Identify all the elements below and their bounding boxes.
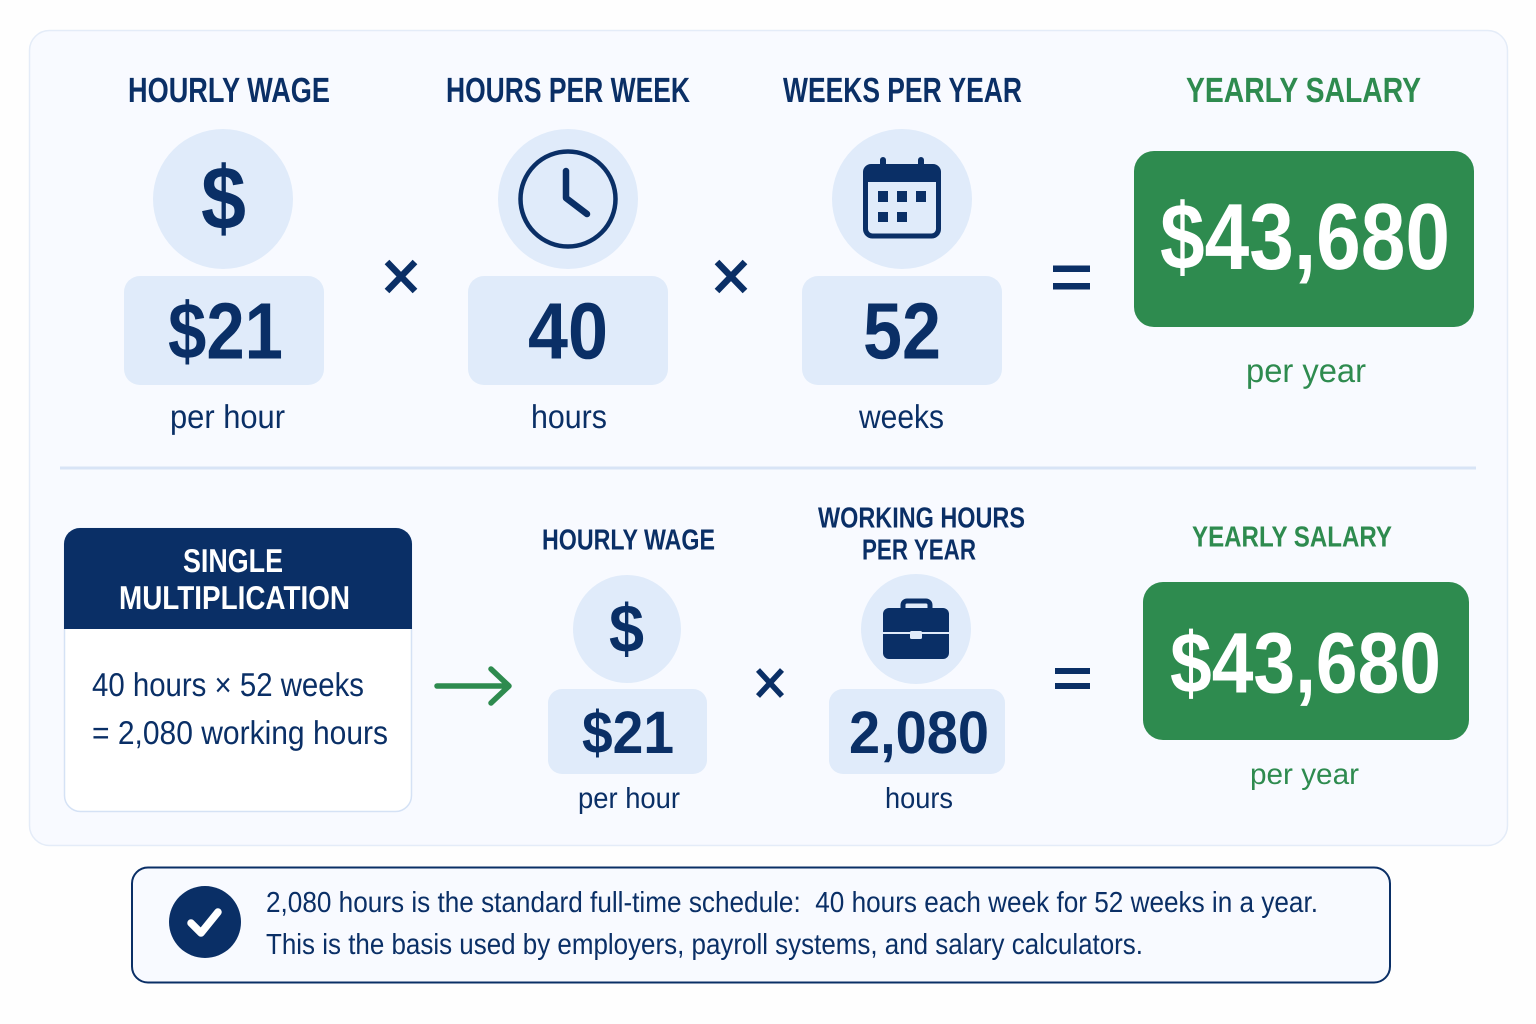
result box: $43,680 xyxy=(1134,151,1474,327)
column: yearly salary result (lower) xyxy=(1143,522,1469,791)
label: per hour: per hour xyxy=(170,398,285,435)
column: working hours per year xyxy=(818,502,1025,815)
icon: dollar sign: $ xyxy=(609,591,644,667)
note text: 2,080 hours is the standard full-time schedule: 40 hours each week for 52 weeks in a year. xyxy=(266,887,1318,919)
label: hours: hours xyxy=(531,398,607,435)
heading: working hours per year: PER YEAR xyxy=(862,534,976,566)
value box: 2,080: 2,080 xyxy=(849,699,989,766)
value box: $21 xyxy=(548,689,707,774)
main panel xyxy=(30,30,1508,846)
operator: times xyxy=(758,670,782,696)
value box: $21: $21 xyxy=(168,286,283,376)
result box: $43,680: $43,680 xyxy=(1160,184,1450,289)
value box: 52 xyxy=(802,276,1002,385)
icon: dollar sign xyxy=(153,129,293,269)
operator: equals xyxy=(1053,266,1090,290)
heading: yearly salary: YEARLY SALARY xyxy=(1186,71,1421,110)
arrow xyxy=(437,669,509,703)
divider xyxy=(60,466,1476,470)
heading: yearly salary: YEARLY SALARY xyxy=(1192,522,1392,554)
column: hourly wage xyxy=(124,71,330,435)
operator: equals xyxy=(1055,668,1090,689)
label: per year: per year xyxy=(1246,352,1366,389)
label: weeks: weeks xyxy=(858,398,944,435)
value box: 40: 40 xyxy=(528,286,608,376)
heading: hourly wage: HOURLY WAGE xyxy=(542,524,715,556)
operator: times xyxy=(717,262,745,291)
column: hourly wage (lower) xyxy=(542,524,715,815)
note text: This is the basis used by employers, payroll systems, and salary calculators. xyxy=(266,929,1143,961)
result box: $43,680: $43,680 xyxy=(1170,616,1441,712)
label: per year: per year xyxy=(1250,759,1359,791)
value box: $21 xyxy=(124,276,324,385)
value box: $21: $21 xyxy=(582,699,674,766)
icon: check mark xyxy=(169,886,241,958)
value box: 40 xyxy=(468,276,668,385)
value box: 52: 52 xyxy=(863,286,941,376)
note text xyxy=(266,887,1318,961)
column: yearly salary result xyxy=(1134,71,1474,389)
card header: MULTIPLICATION xyxy=(119,579,350,616)
note box xyxy=(132,868,1390,982)
result box: $43,680 xyxy=(1143,582,1469,740)
heading: hourly wage: HOURLY WAGE xyxy=(128,71,330,110)
card header: SINGLE xyxy=(183,542,283,579)
label: per hour: per hour xyxy=(578,783,680,815)
card text: 40 hours × 52 weeks xyxy=(92,666,364,703)
card text: = 2,080 working hours xyxy=(92,714,388,751)
icon: briefcase xyxy=(861,574,971,684)
heading: weeks per year: WEEKS PER YEAR xyxy=(783,71,1022,110)
column: hours per week xyxy=(446,71,690,435)
card text xyxy=(92,666,388,751)
heading: working hours per year xyxy=(818,502,1025,566)
card header xyxy=(64,528,412,629)
heading: working hours per year: WORKING HOURS xyxy=(818,502,1025,534)
icon: clock xyxy=(498,129,638,269)
label: hours: hours xyxy=(885,783,953,815)
column: weeks per year xyxy=(783,71,1022,435)
icon: calendar xyxy=(832,129,972,269)
heading: hours per week: HOURS PER WEEK xyxy=(446,71,690,110)
icon: dollar sign xyxy=(573,575,681,683)
value box: 2,080 xyxy=(829,689,1005,774)
operator: times xyxy=(387,262,415,291)
icon: dollar sign: $ xyxy=(201,149,246,249)
card: single multiplication xyxy=(64,528,412,812)
